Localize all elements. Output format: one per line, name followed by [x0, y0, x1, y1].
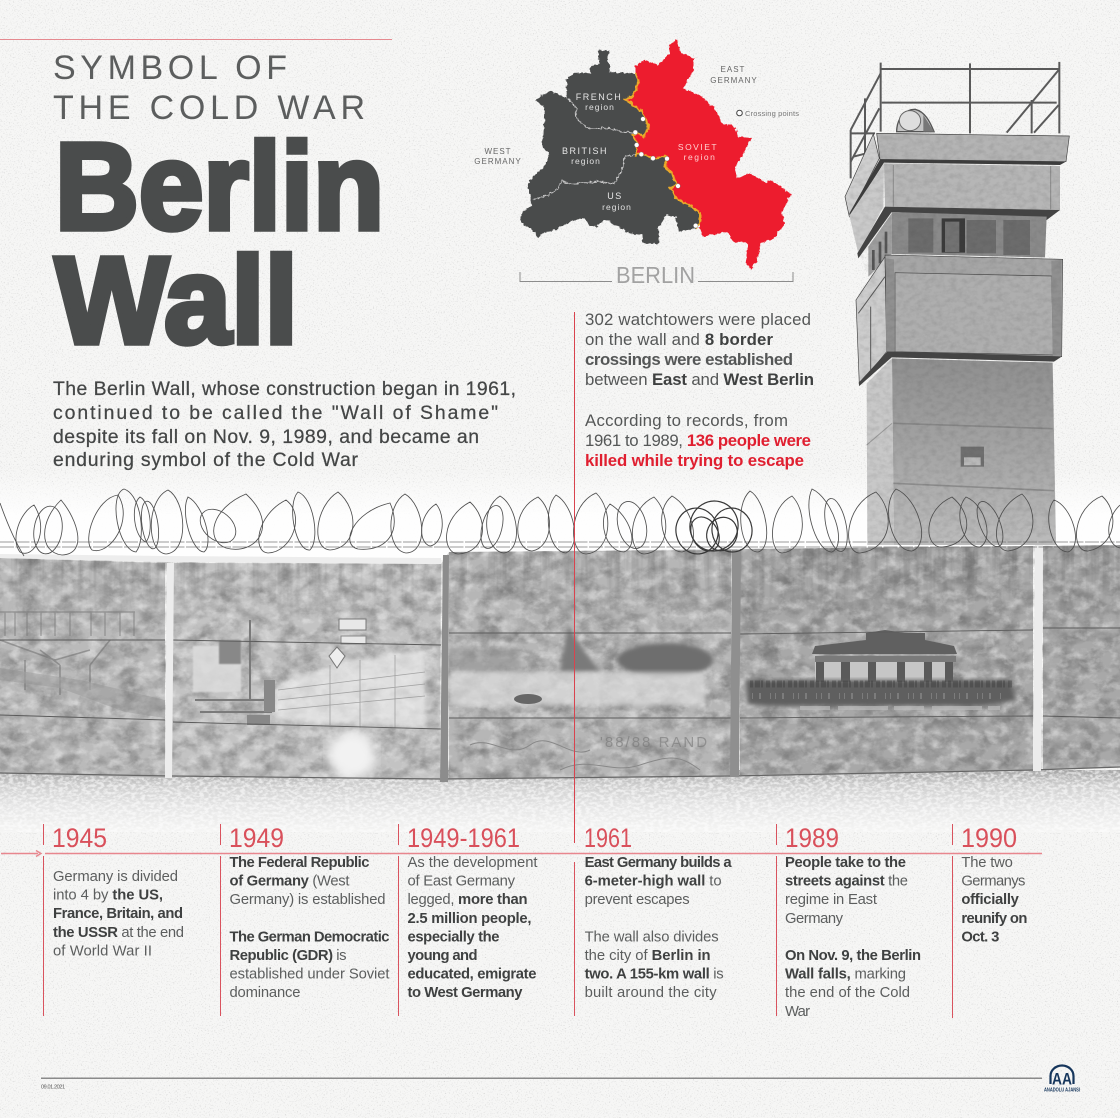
- 1945: France, Britain, and: [53, 906, 183, 922]
- 1989: Germany: [785, 911, 844, 927]
- main title: Berlin: [55, 119, 384, 256]
- 1989: regime in East: [785, 892, 877, 908]
- 1990: officially: [961, 892, 1020, 908]
- watchtower facts: 1961 to 1989, 136 people were: [585, 431, 811, 450]
- searchlight: [897, 109, 934, 132]
- legend: crossing points: Crossing points: [745, 109, 799, 118]
- 1949-1961: legged, more than: [408, 892, 528, 908]
- tower railing: [851, 62, 1059, 178]
- 1949-1961: [398, 823, 538, 1016]
- 1949: 1949: [229, 823, 284, 853]
- timeline axis and arrow: [1, 850, 1042, 856]
- 1961: East Germany builds a: [585, 855, 732, 871]
- logo: Anadolu Agency: ANADOLU AJANSI: [1044, 1088, 1080, 1094]
- intro paragraph: [53, 378, 516, 471]
- wall panels: [0, 545, 1120, 779]
- map label BERLIN: [520, 262, 793, 288]
- region labels: SOVIET: [678, 142, 718, 152]
- crossing points: [633, 117, 698, 228]
- 1989: People take to the: [785, 855, 906, 871]
- tower upper box: [849, 163, 1060, 258]
- red vertical axis: [574, 312, 575, 843]
- 1945: into 4 by the US,: [53, 888, 163, 904]
- 1961: two. A 155-km wall is: [585, 967, 724, 983]
- logo: Anadolu Agency: AA: [1052, 1070, 1072, 1088]
- kicker: SYMBOL OF: [53, 49, 287, 87]
- region labels: US: [607, 191, 623, 201]
- wall mural: Brandenburg Gate and crowd: [746, 630, 1016, 708]
- footer rule: [41, 1078, 1042, 1079]
- region labels: region: [571, 156, 601, 166]
- 1990: The two: [961, 855, 1013, 871]
- 1949-1961: to West Germany: [408, 985, 523, 1001]
- 1945: [44, 823, 184, 1016]
- 1949-1961: young and: [408, 948, 478, 964]
- 1990: Oct. 3: [961, 929, 999, 945]
- map of divided Berlin: [474, 40, 799, 288]
- region labels: FRENCH: [576, 92, 622, 102]
- 1989: On Nov. 9, the Berlin: [785, 948, 921, 964]
- main title: Wall: [55, 233, 298, 370]
- region labels: GERMANY: [710, 76, 758, 85]
- 1989: Wall falls, marking: [785, 967, 906, 983]
- 1949-1961: especially the: [408, 929, 500, 945]
- tower parapet: [845, 133, 1069, 217]
- 1961: 1961: [584, 823, 632, 853]
- 1949: established under Soviet: [230, 967, 390, 983]
- 1961: 6-meter-high wall to: [585, 874, 722, 890]
- main title: [55, 119, 384, 370]
- tower shaft: [867, 358, 1056, 545]
- region labels: WEST: [484, 147, 512, 156]
- 1949: Germany) is established: [230, 892, 386, 908]
- watchtower facts: crossings were established: [585, 350, 793, 369]
- 1949: dominance: [230, 985, 300, 1001]
- 1961: The wall also divides: [585, 929, 719, 945]
- 1945: Germany is divided: [53, 869, 178, 885]
- wall mural: trees and snow: [449, 625, 713, 705]
- kicker: THE COLD WAR: [53, 89, 365, 127]
- tower lower cabin: [856, 255, 1063, 386]
- watchtower facts: on the wall and 8 border: [585, 330, 773, 349]
- wall posts: [165, 545, 1043, 782]
- logo: Anadolu Agency: [1044, 1066, 1080, 1094]
- intro paragraph: enduring symbol of the Cold War: [53, 449, 359, 471]
- watchtower facts: 302 watchtowers were placed: [585, 310, 811, 329]
- 1989: War: [785, 1004, 810, 1020]
- Soviet region: [625, 40, 792, 270]
- 1990: 1990: [961, 823, 1017, 853]
- map label BERLIN: BERLIN: [616, 262, 695, 288]
- tower windows: [868, 212, 1047, 277]
- intro paragraph: continued to be called the "Wall of Shame": [53, 402, 498, 424]
- wall cracks: [0, 628, 1120, 779]
- region labels: region: [684, 152, 716, 162]
- photo: barbed wire: [0, 489, 1120, 558]
- 1990: [952, 823, 1027, 1018]
- 1989: the end of the Cold: [785, 985, 910, 1001]
- photo: concrete wall: [0, 540, 1120, 785]
- watchtower facts: [585, 310, 814, 470]
- wall mural: street scene: [193, 619, 425, 779]
- 1961: prevent escapes: [585, 892, 690, 908]
- top rule: [0, 39, 392, 40]
- watchtower facts: killed while trying to escape: [585, 451, 804, 470]
- 1990: Germanys: [961, 874, 1025, 890]
- 1961: the city of Berlin in: [585, 948, 711, 964]
- 1945: the USSR at the end: [53, 925, 184, 941]
- watchtower facts: According to records, from: [585, 411, 788, 430]
- 1949-1961: educated, emigrate: [408, 967, 536, 983]
- wall mural: left fence: [0, 612, 165, 718]
- region labels: GERMANY: [474, 157, 522, 166]
- 1949-1961: of East Germany: [408, 874, 516, 890]
- 1949-1961: 2.5 million people,: [408, 911, 532, 927]
- wall mural: graffiti: [470, 734, 709, 770]
- intro paragraph: despite its fall on Nov. 9, 1989, and became an: [53, 426, 479, 448]
- region labels: region: [585, 102, 615, 112]
- wall mural: graffiti: '88/88 RAND: [600, 734, 709, 751]
- 1949: Republic (GDR) is: [230, 948, 346, 964]
- 1989: [776, 823, 921, 1020]
- kicker: [53, 49, 365, 127]
- western regions: [520, 51, 700, 243]
- 1949-1961: 1949-1961: [407, 823, 520, 853]
- 1961: [574, 823, 732, 1016]
- 1989: streets against the: [785, 874, 908, 890]
- region labels: region: [602, 202, 632, 212]
- title block: [53, 49, 384, 370]
- 1961: built around the city: [585, 985, 717, 1001]
- region labels: EAST: [721, 65, 745, 74]
- photo: watchtower: [844, 62, 1070, 545]
- 1949: [220, 823, 390, 1016]
- watchtower facts: between East and West Berlin: [585, 370, 814, 389]
- 1989: 1989: [785, 823, 839, 853]
- 1949: The German Democratic: [230, 929, 390, 945]
- 1949-1961: As the development: [408, 855, 538, 871]
- tower small vent: [961, 447, 984, 467]
- wall coping: [0, 554, 441, 564]
- sector boundaries: [533, 98, 636, 200]
- region labels: BRITISH: [562, 146, 608, 156]
- date: 09.01.2021: [41, 1084, 65, 1090]
- border line: [625, 73, 700, 228]
- 1949: of Germany (West: [230, 874, 350, 890]
- 1945: 1945: [52, 823, 107, 853]
- 1949: The Federal Republic: [230, 855, 370, 871]
- intro paragraph: The Berlin Wall, whose construction began in 1961,: [53, 378, 516, 400]
- photo: ground below the wall: [0, 770, 1120, 832]
- 1945: of World War II: [53, 943, 152, 959]
- timeline: [1, 823, 1042, 1020]
- region labels: [474, 65, 758, 212]
- 1990: reunify on: [961, 911, 1027, 927]
